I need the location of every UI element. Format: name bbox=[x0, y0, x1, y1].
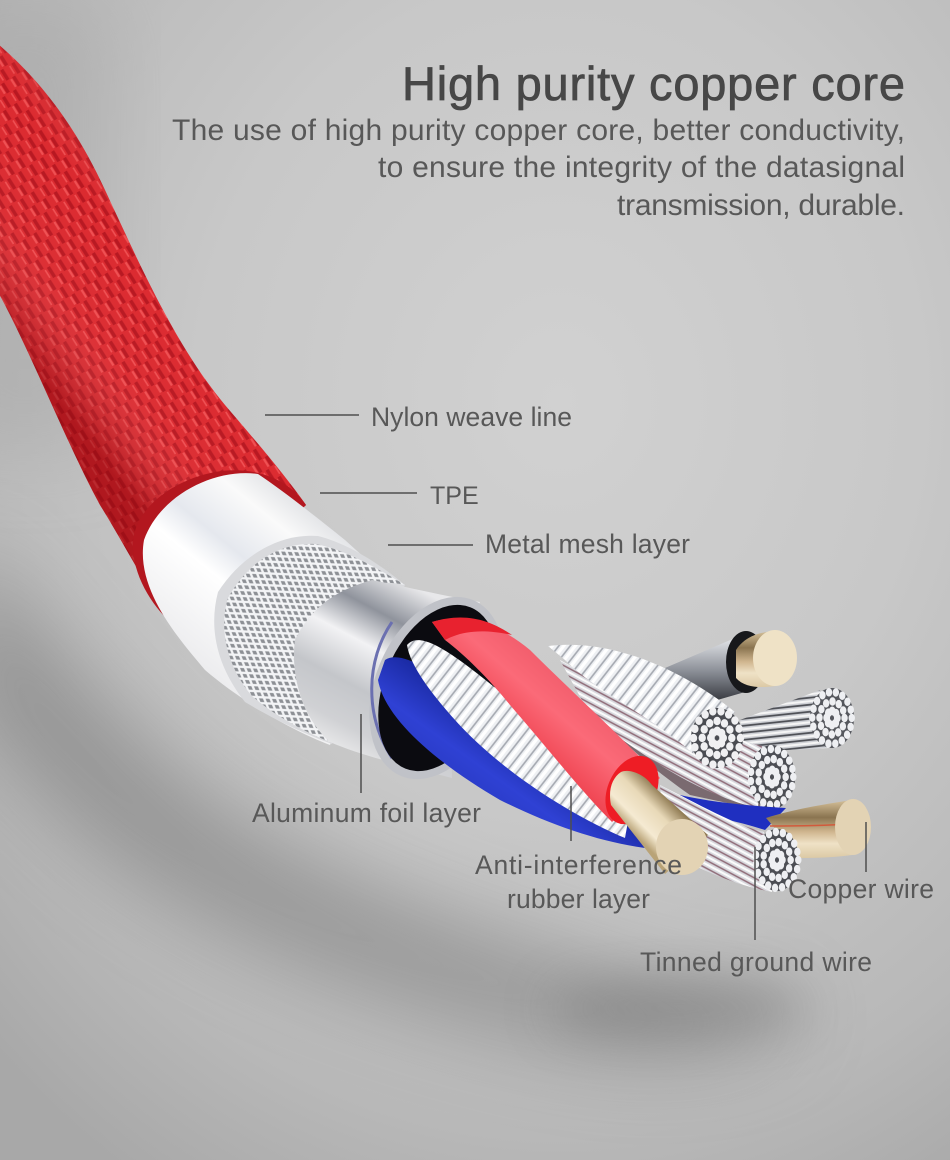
description text bbox=[172, 114, 905, 222]
title: High purity copper core bbox=[402, 57, 905, 110]
red nylon braided cable bbox=[0, 44, 306, 626]
copper wire bbox=[766, 799, 871, 858]
metal mesh layer bbox=[214, 536, 405, 744]
tinned strand: top large bbox=[548, 645, 743, 768]
label: anti-interference rubber layer: rubber layer bbox=[507, 884, 650, 914]
label: copper wire: Copper wire bbox=[788, 874, 934, 904]
foil opening ring bbox=[344, 577, 530, 799]
copper conductor end bbox=[595, 747, 708, 875]
black sheath wire with copper end bbox=[665, 630, 797, 705]
blue insulated wire bbox=[378, 657, 786, 848]
cable shadow bbox=[0, 540, 810, 1054]
tinned strand: right upper bbox=[740, 688, 854, 752]
dark strands behind red wire bbox=[575, 680, 760, 810]
description text: to ensure the integrity of the datasignal bbox=[378, 151, 905, 184]
label: metal mesh layer: Metal mesh layer bbox=[485, 529, 690, 559]
red insulated wire bbox=[432, 618, 660, 822]
label: anti-interference rubber layer bbox=[475, 786, 682, 914]
label: aluminum foil layer: Aluminum foil layer bbox=[252, 798, 481, 828]
label: anti-interference rubber layer: Anti-interference bbox=[475, 850, 682, 880]
description text: transmission, durable. bbox=[617, 189, 905, 222]
label: nylon weave line: Nylon weave line bbox=[371, 402, 572, 432]
aluminum foil layer bbox=[294, 580, 480, 778]
TPE layer bbox=[143, 473, 400, 745]
anti-interference tinned bundle bbox=[407, 640, 630, 838]
label: TPE: TPE bbox=[430, 482, 479, 510]
description text: The use of high purity copper core, better conductivity, bbox=[172, 114, 905, 147]
label: tinned ground wire: Tinned ground wire bbox=[640, 947, 872, 977]
tinned strand: middle bbox=[560, 660, 795, 809]
cable end ring bbox=[133, 470, 306, 626]
tinned ground wire bbox=[660, 785, 799, 892]
